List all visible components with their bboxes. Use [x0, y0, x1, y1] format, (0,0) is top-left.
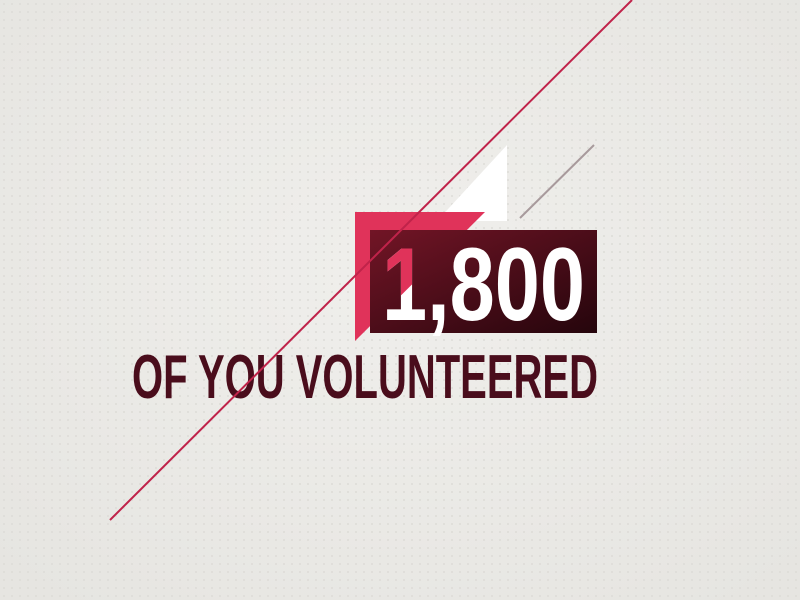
red diagonal line: [110, 0, 632, 520]
white triangle: [437, 145, 507, 221]
grey line: [520, 145, 594, 218]
pink triangle: [355, 212, 485, 341]
number box: 1,800: [382, 227, 585, 343]
